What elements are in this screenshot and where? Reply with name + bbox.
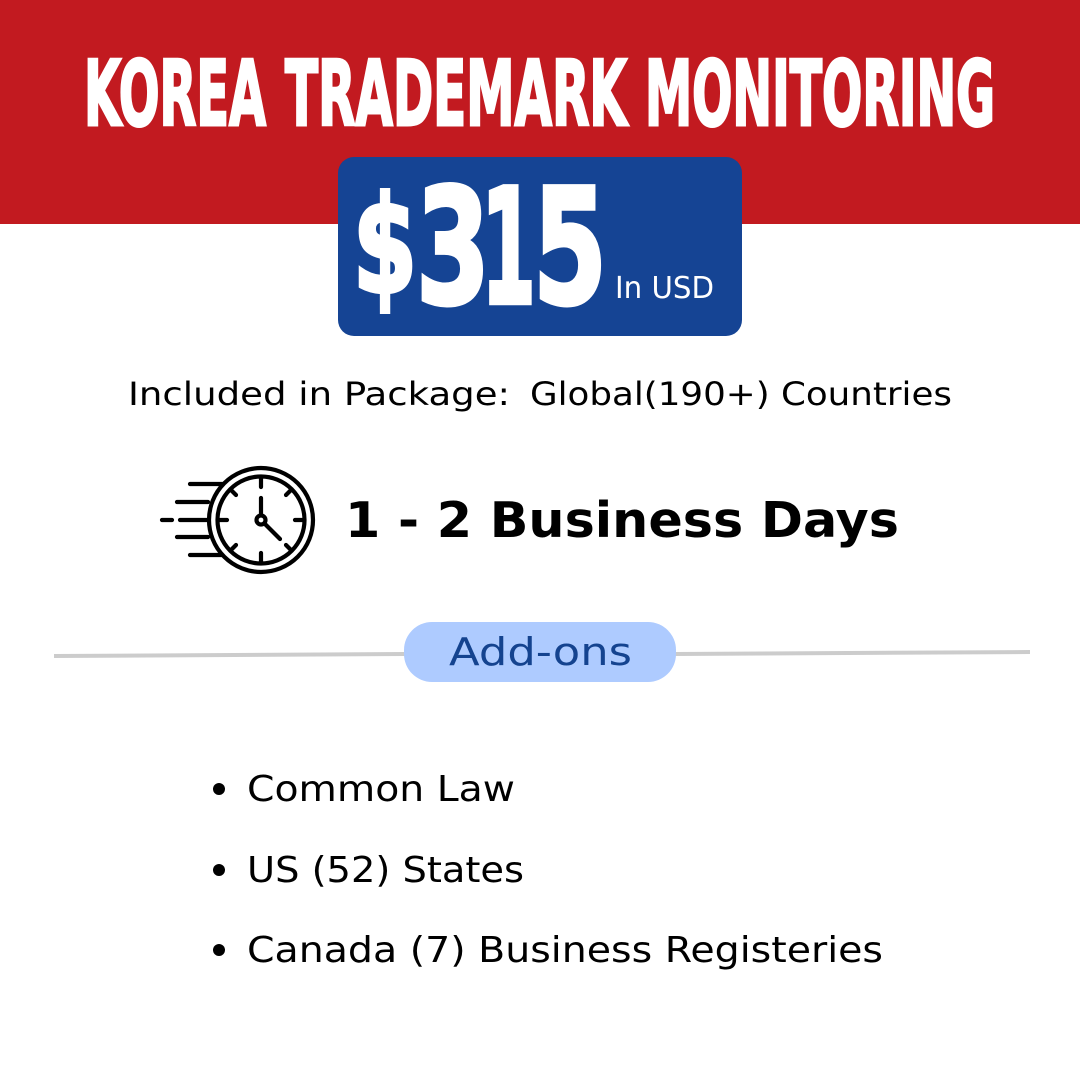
price panel xyxy=(338,154,742,341)
package text xyxy=(128,375,952,413)
price: 1 xyxy=(481,154,536,341)
header band xyxy=(0,0,1080,224)
delivery time: 1 - 2 Business Days xyxy=(345,492,899,549)
package text: Global(190+) Countries xyxy=(530,375,952,413)
item: common law: Common Law xyxy=(247,769,515,810)
item: US states: US (52) States xyxy=(247,850,524,891)
title: TRADEMARK xyxy=(285,42,629,147)
title xyxy=(84,42,995,147)
add-ons list xyxy=(213,769,883,971)
divider left xyxy=(54,654,405,656)
icon: fast clock xyxy=(162,468,313,572)
price xyxy=(353,154,607,341)
add-ons label: Add-ons xyxy=(449,630,632,674)
currency note: In USD xyxy=(615,271,714,306)
package text: Included in Package: xyxy=(128,375,510,413)
price: 3 xyxy=(416,154,490,341)
divider right xyxy=(675,652,1030,654)
add-ons pill xyxy=(404,622,676,682)
price: 5 xyxy=(533,154,607,341)
price: $ xyxy=(353,168,417,324)
item: Canada registries: Canada (7) Business Registeries xyxy=(247,930,883,971)
title: KOREA xyxy=(84,42,266,147)
